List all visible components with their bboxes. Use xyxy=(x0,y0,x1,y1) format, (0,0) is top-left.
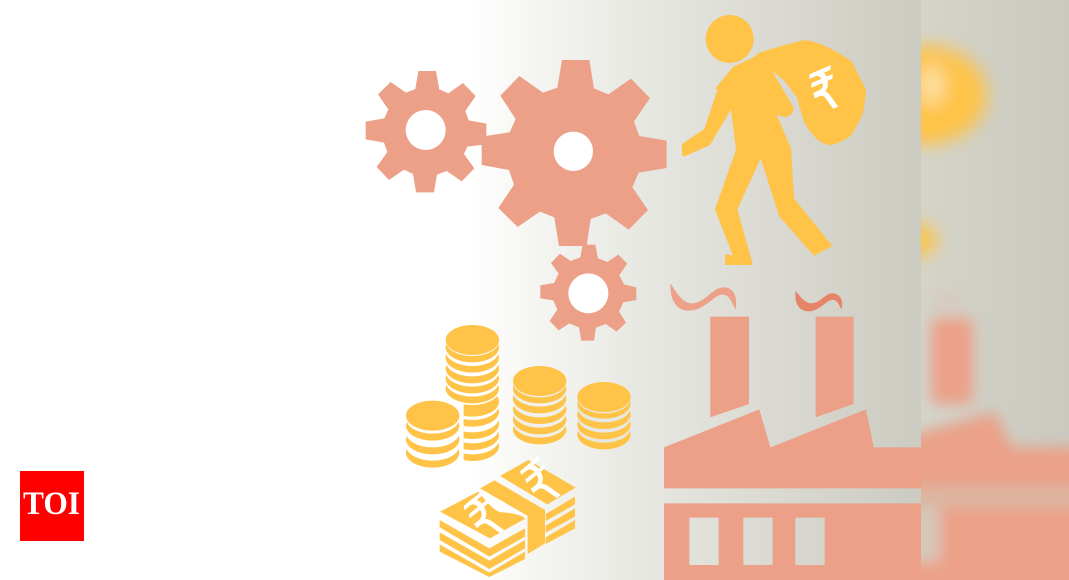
smoke plume left xyxy=(670,283,736,311)
gear: large centre xyxy=(482,60,667,246)
chimney right xyxy=(816,317,854,417)
logo background xyxy=(20,471,84,541)
blurred right panel xyxy=(921,0,1069,580)
top note, right xyxy=(500,460,576,504)
gear: upper left xyxy=(366,71,486,192)
paper band xyxy=(480,480,545,554)
note layers, left xyxy=(440,520,525,577)
chimney left xyxy=(710,317,749,417)
coin stack: tall, lower part xyxy=(464,396,499,461)
gear: small lower xyxy=(540,245,636,341)
gears xyxy=(366,60,667,341)
factory xyxy=(664,283,921,580)
rupee on right note: ₹ xyxy=(512,446,572,522)
coin stack: tall, upper part xyxy=(444,325,500,405)
coin stack: short left xyxy=(406,401,459,468)
icon: person carrying rupee sack xyxy=(682,15,866,265)
person body and sack xyxy=(682,40,866,265)
coin stacks xyxy=(406,325,631,468)
sawtooth roof xyxy=(664,409,921,488)
smoke plume right xyxy=(795,291,842,311)
coin stack: right xyxy=(577,382,631,449)
icon: bundle of rupee notes xyxy=(440,446,576,577)
TOI logo xyxy=(20,471,84,541)
logo text: TOI xyxy=(23,486,80,522)
top note, left xyxy=(440,488,528,538)
person head xyxy=(706,15,754,63)
factory base with windows xyxy=(664,503,921,580)
rupee symbol on sack: ₹ xyxy=(805,56,844,128)
note layers, right xyxy=(546,497,575,544)
rupee on left note: ₹ xyxy=(455,481,515,557)
coin stack: middle xyxy=(513,366,566,444)
